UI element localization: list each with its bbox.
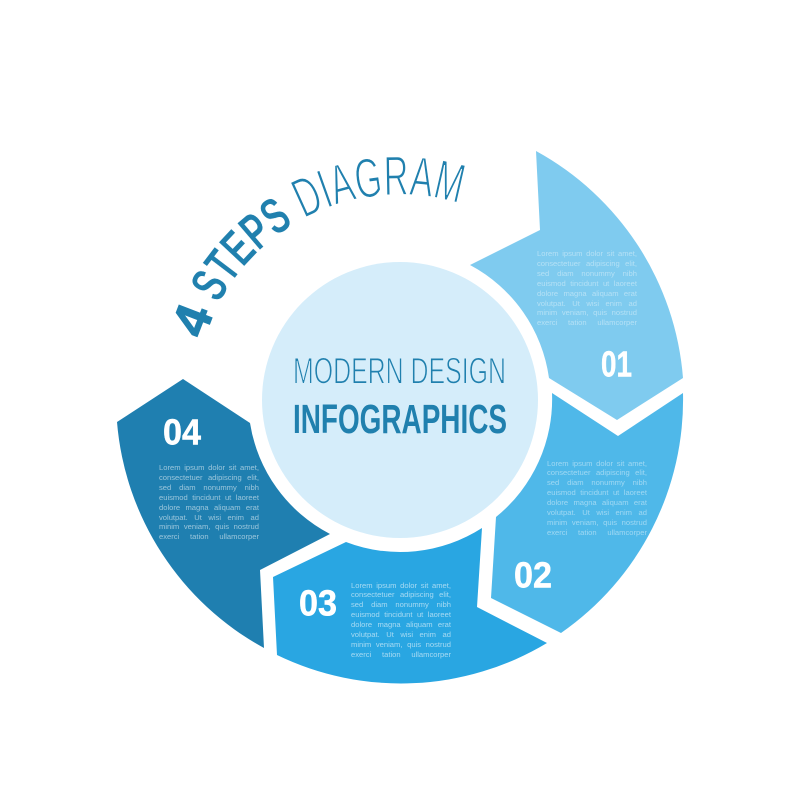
arrow shape: step 03: [273, 528, 547, 683]
text block: step 03: [351, 580, 451, 660]
panel: step 04: [117, 379, 330, 648]
text block: step 04: Lorem ipsum dolor sit amet,: [159, 463, 259, 472]
text block: step 02: euismod tincidunt ut laoreet: [547, 488, 647, 497]
arrow shape: step 01: [470, 151, 683, 420]
text block: step 02: volutpat. Ut wisi enim ad: [547, 508, 647, 517]
heading: modern design: MODERN DESIGN: [293, 350, 506, 392]
panel: step 03: [273, 528, 547, 683]
text block: step 03: dolore magna aliquam erat: [351, 620, 451, 629]
text block: step 04: euismod tincidunt ut laoreet: [159, 493, 259, 502]
text block: step 04: minim veniam, quis nostrud: [159, 522, 259, 531]
text block: step 02: dolore magna aliquam erat: [547, 498, 647, 507]
text block: step 01: euismod tincidunt ut laoreet: [537, 279, 637, 288]
text block: step 01: consectetuer adipiscing elit,: [537, 259, 637, 268]
text block: step 04: sed diam nonummy nibh: [159, 483, 259, 492]
number: 02: 02: [514, 554, 552, 596]
number: 01: 01: [601, 344, 632, 384]
text block: step 01: minim veniam, quis nostrud: [537, 308, 637, 317]
panel: step 01: [470, 151, 683, 420]
text block: step 01: exerci tation ullamcorper: [537, 318, 637, 327]
text block: step 04: exerci tation ullamcorper: [159, 532, 259, 541]
text block: step 03: minim veniam, quis nostrud: [351, 640, 451, 649]
text block: step 01: dolore magna aliquam erat: [537, 289, 637, 298]
number: 04: 04: [163, 412, 201, 452]
text block: step 03: volutpat. Ut wisi enim ad: [351, 630, 451, 639]
arrow shape: step 04: [117, 379, 330, 648]
center circle: [262, 262, 538, 538]
text block: step 03: sed diam nonummy nibh: [351, 600, 451, 609]
curved title: diagram: DIAGRAM: [291, 157, 465, 216]
text block: step 04: volutpat. Ut wisi enim ad: [159, 513, 259, 522]
text block: step 01: Lorem ipsum dolor sit amet,: [537, 249, 637, 258]
heading: infographics: INFOGRAPHICS: [293, 396, 507, 442]
text block: step 02: [547, 458, 647, 538]
text block: step 01: [537, 249, 637, 329]
arrow shape: step 02: [491, 393, 683, 633]
text block: step 03: Lorem ipsum dolor sit amet,: [351, 580, 451, 590]
curved title: 4: 4: [176, 304, 213, 338]
text block: step 04: [159, 463, 259, 543]
text block: step 02: minim veniam, quis nostrud: [547, 518, 647, 527]
text block: step 04: consectetuer adipiscing elit,: [159, 473, 259, 482]
number: 03: 03: [299, 582, 337, 624]
text block: step 03: exerci tation ullamcorper: [351, 650, 451, 659]
text block: step 03: euismod tincidunt ut laoreet: [351, 610, 451, 619]
curved title: steps: STEPS: [192, 198, 290, 300]
text block: step 02: Lorem ipsum dolor sit amet,: [547, 458, 647, 468]
text block: step 02: consectetuer adipiscing elit,: [547, 468, 647, 477]
text block: step 02: exerci tation ullamcorper: [547, 528, 647, 537]
text block: step 02: sed diam nonummy nibh: [547, 478, 647, 487]
panel: step 02: [491, 393, 683, 633]
text block: step 03: consectetuer adipiscing elit,: [351, 590, 451, 599]
text block: step 04: dolore magna aliquam erat: [159, 503, 259, 512]
text block: step 01: volutpat. Ut wisi enim ad: [537, 299, 637, 308]
text block: step 01: sed diam nonummy nibh: [537, 269, 637, 278]
